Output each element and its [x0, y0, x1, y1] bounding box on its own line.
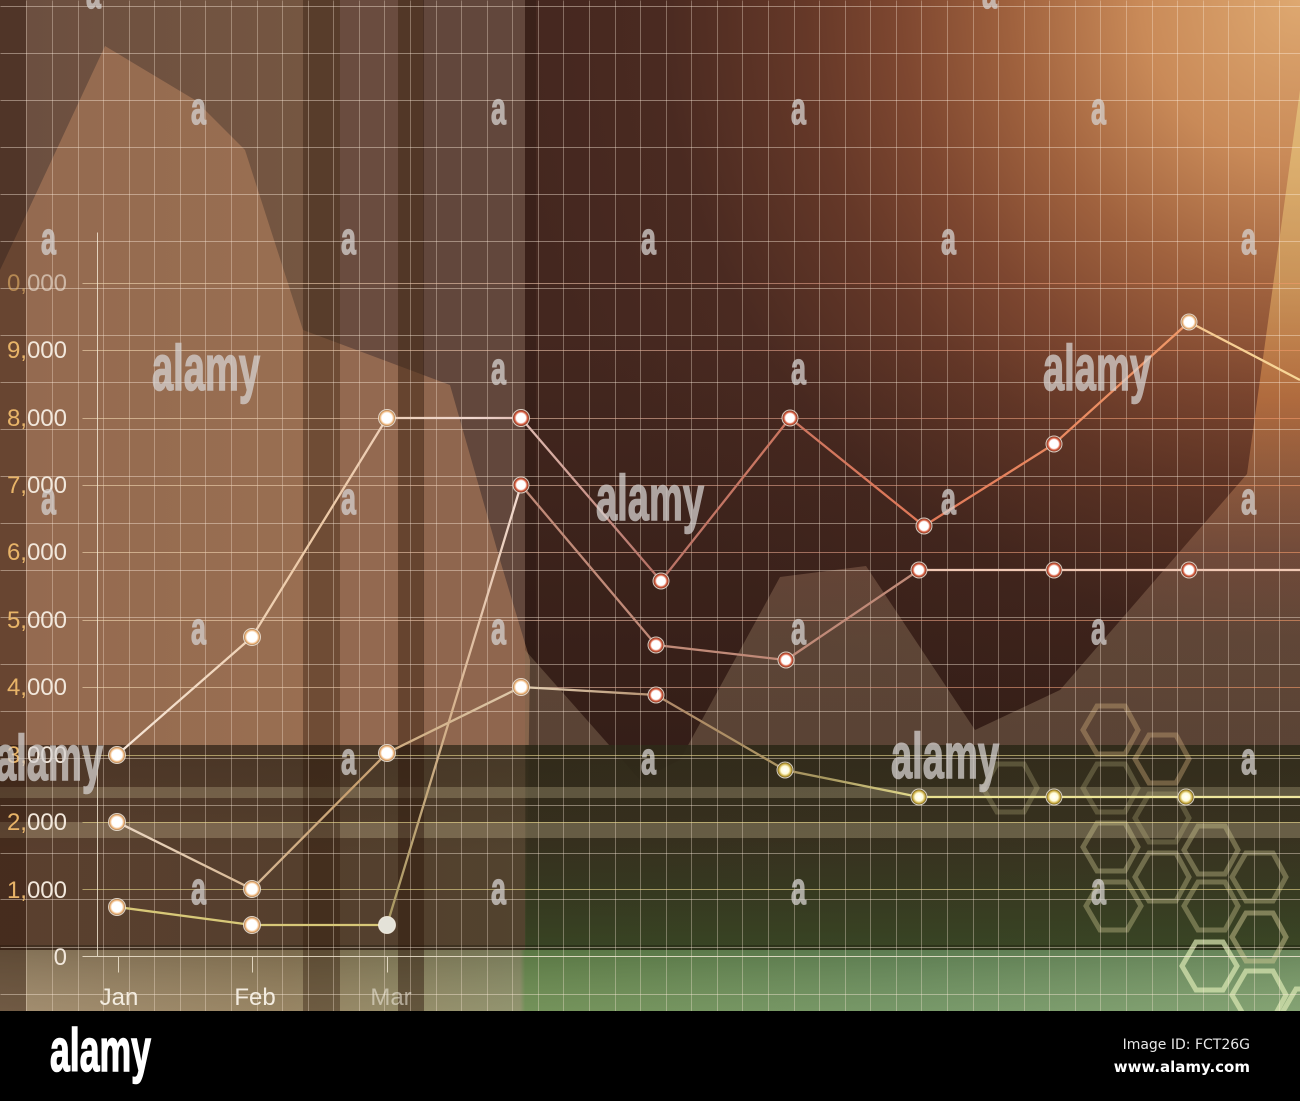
footer logo: alamy — [50, 1017, 151, 1084]
watermark small letters: a — [191, 83, 207, 134]
line series B — [117, 687, 1300, 889]
y axis labels: 8,000 — [7, 405, 67, 432]
watermark words — [0, 332, 1151, 794]
watermark words: alamy — [1043, 332, 1151, 404]
honeycomb hexagon pattern — [983, 706, 1300, 1037]
footer image id: Image ID: FCT26G — [1123, 1037, 1250, 1053]
watermark small letters — [41, 0, 1257, 914]
watermark small letters: a — [791, 863, 807, 914]
chart axes and value gridlines — [82, 232, 1300, 972]
watermark small letters: a — [1091, 603, 1107, 654]
footer bar — [0, 1011, 1300, 1101]
watermark small letters: a — [341, 473, 357, 524]
y axis labels: 5,000 — [7, 607, 67, 634]
watermark small letters: a — [491, 343, 507, 394]
y axis labels: 1,000 — [7, 877, 67, 904]
y axis labels: 9,000 — [7, 337, 67, 364]
watermark words: alamy — [152, 332, 260, 404]
data point markers — [108, 314, 1197, 934]
watermark small letters: a — [791, 83, 807, 134]
watermark small letters: a — [341, 213, 357, 264]
y axis labels: 2,000 — [7, 809, 67, 836]
watermark small letters: a — [341, 733, 357, 784]
watermark small letters: a — [941, 473, 957, 524]
watermark small letters: a — [1241, 473, 1257, 524]
watermark small letters: a — [1241, 213, 1257, 264]
watermark words: alamy — [0, 722, 103, 794]
bottom green band — [0, 950, 1300, 1011]
watermark small letters: a — [191, 863, 207, 914]
y axis labels — [7, 270, 67, 971]
x axis month labels — [100, 984, 412, 1011]
watermark small letters: a — [641, 733, 657, 784]
watermark small letters: a — [491, 863, 507, 914]
watermark small letters: a — [491, 83, 507, 134]
watermark small letters: a — [1241, 733, 1257, 784]
y axis labels: 0 — [54, 944, 67, 971]
line series C — [117, 485, 1300, 925]
watermark small letters: a — [641, 213, 657, 264]
x axis month labels: Jan — [100, 984, 138, 1011]
horizontal lower zone — [0, 745, 1300, 950]
y axis labels: 7,000 — [7, 472, 67, 499]
y axis labels: 4,000 — [7, 674, 67, 701]
y axis labels: 3,000 — [7, 742, 67, 769]
watermark small letters: a — [791, 343, 807, 394]
watermark small letters: a — [791, 603, 807, 654]
watermark words: alamy — [891, 720, 999, 792]
line series A — [117, 322, 1300, 755]
vertical dark bands — [0, 0, 424, 1011]
watermark small letters: a — [491, 603, 507, 654]
y axis labels: 6,000 — [7, 539, 67, 566]
watermark small letters: a — [41, 213, 57, 264]
watermark small letters: a — [1091, 863, 1107, 914]
area chart: light silhouette left — [0, 46, 530, 1011]
watermark small letters: a — [191, 603, 207, 654]
watermark small letters: a — [941, 213, 957, 264]
watermark small letters: a — [1091, 83, 1107, 134]
area chart: lighter silhouette right — [525, 90, 1300, 1011]
x axis month labels: Feb — [234, 984, 276, 1011]
y axis labels: 0,000 — [7, 270, 67, 297]
watermark words: alamy — [596, 462, 704, 534]
x axis month labels: Mar — [370, 984, 412, 1011]
watermark small letters: a — [41, 473, 57, 524]
footer website: www.alamy.com — [1114, 1058, 1250, 1076]
